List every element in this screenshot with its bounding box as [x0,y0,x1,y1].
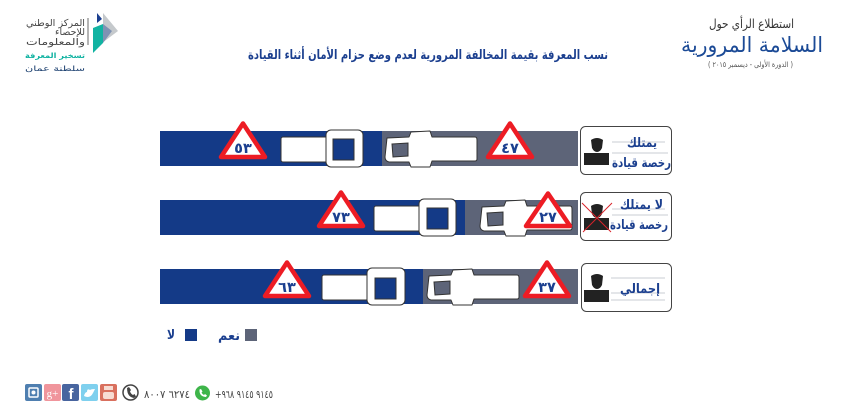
label: no licence: لا يمتلك [620,198,663,213]
logo name text: والمعلومات [26,37,85,48]
logo slogan: تسخير المعرفة [25,51,85,60]
triangle: 53 [221,124,265,157]
triangle: 63 [265,262,309,296]
legend [167,328,257,344]
label: holds licence: رخصة قيادة [612,156,671,171]
logo name text [26,18,85,48]
label: holds licence: يمتلك [627,136,657,151]
logo mark [93,13,118,53]
bar: yes 47 [382,131,578,166]
logo: national centre for statistics and information [25,13,118,73]
legend: no: لا [167,328,175,343]
triangle: 47 [488,124,532,157]
belt tongue [281,130,363,167]
icon: facebook: f [68,386,74,403]
label: no licence: رخصة قيادة [610,218,668,233]
triangle: 47: ٤٧ [501,141,519,157]
triangle: 63: ٦٣ [278,280,296,296]
row 1: holds driving licence [160,124,672,174]
icon: person [584,274,609,302]
label: holds licence [580,126,672,174]
triangle: 27 [526,194,570,226]
bar: yes 37 [423,269,578,304]
label: total: إجمالي [620,282,660,297]
icon: google plus [44,384,61,401]
icon: twitter [81,384,98,401]
icon: google plus: g+ [47,388,58,400]
label: total [582,264,672,312]
icon: whatsapp [195,386,210,400]
label: no licence [580,192,672,240]
icon: youtube [100,384,117,401]
whatsapp number: +٩٦٨ ٩١٤٥ ٩١٤٥ [215,388,273,401]
header: survey title [681,15,823,69]
logo name text: المركز الوطني [26,18,85,29]
belt tongue [322,268,405,305]
survey intro: استطلاع الرأي حول [709,15,794,32]
triangle: 73: ٧٣ [332,210,350,226]
belt buckle [480,200,572,236]
legend: yes: نعم [218,329,240,344]
icon: facebook [62,384,79,403]
footer contacts [25,384,273,403]
bar: no 63 [160,269,423,304]
triangle: 53: ٥٣ [234,141,252,157]
belt buckle [385,131,477,167]
logo country: سلطنة عمان [25,64,85,73]
phone number: ٨٠٠٧ ٦٢٧٤ [144,388,190,401]
belt buckle [427,269,519,305]
triangle: 27: ٢٧ [539,210,557,226]
triangle: 37 [525,262,569,296]
triangle: 37: ٣٧ [538,280,556,296]
triangle: 73 [319,192,363,226]
icon: instagram [25,384,42,401]
bar: no 73 [160,200,465,235]
survey edition: ( الدورة الأولى - ديسمبر ٢٠١٥ ) [708,59,793,69]
row 2: no driving licence [160,192,672,240]
survey name: السلامة المرورية [681,33,823,57]
main title: نسب المعرفة بقيمة المخالفة المرورية لعدم وضع حزام الأمان أثناء القيادة [248,46,608,63]
bar: no 53 [160,131,382,166]
logo name text: للإحصاء [55,27,85,38]
icon: phone [123,385,138,400]
row 3: total [160,262,672,312]
bar: yes 27 [465,200,578,235]
icon: crossed person [582,203,612,232]
icon: person [584,138,609,165]
belt tongue [374,199,456,236]
